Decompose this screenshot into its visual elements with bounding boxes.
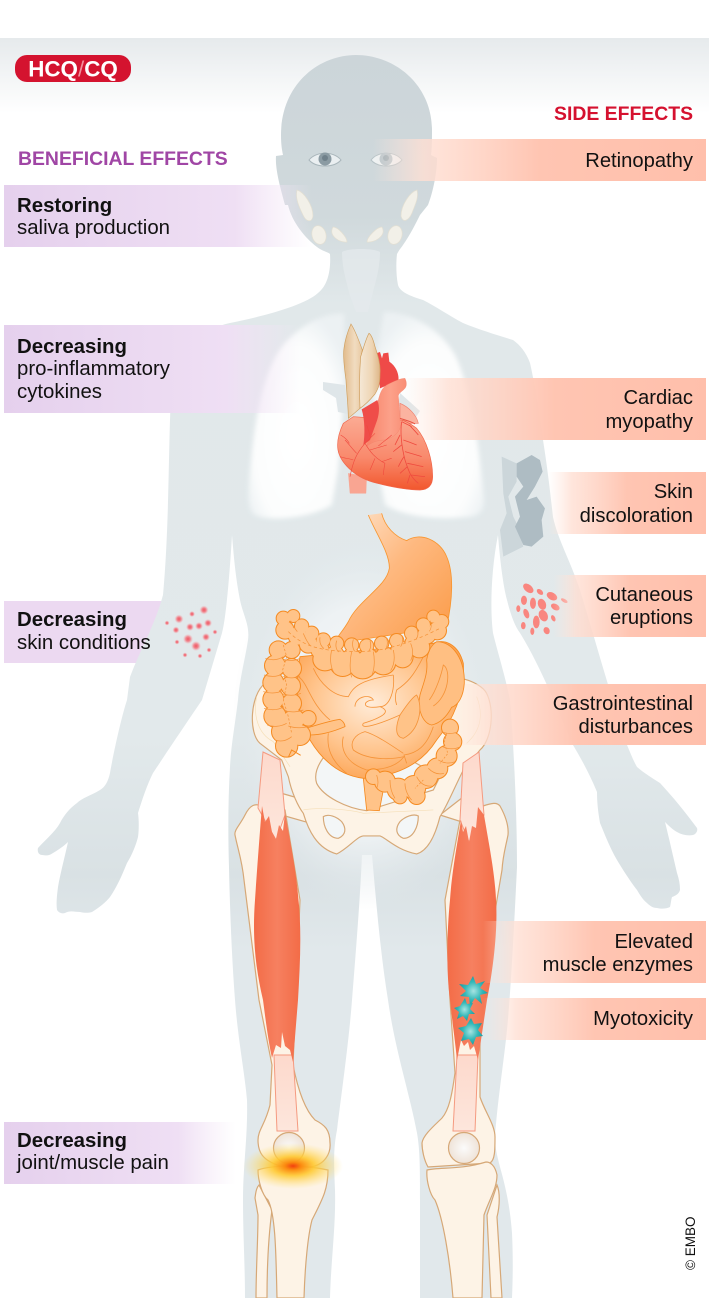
credit: © EMBO	[683, 1217, 698, 1270]
text: decreasing skin conditions: Decreasing	[17, 609, 127, 631]
text: decreasing joint pain	[16, 1130, 169, 1174]
text: cutaneous eruptions: Cutaneous	[595, 584, 693, 606]
text: elevated muscle enzymes	[543, 931, 693, 976]
text: restoring saliva production: Restoring	[17, 195, 112, 217]
text: decreasing cytokines: cytokines	[17, 381, 102, 403]
text: cardiac myopathy: Cardiac	[623, 387, 693, 409]
right femur	[422, 790, 508, 1167]
heading: beneficial effects: BENEFICIAL EFFECTS	[18, 148, 228, 170]
text: decreasing skin conditions	[17, 609, 151, 654]
left femur	[235, 790, 330, 1167]
small intestine	[297, 642, 463, 778]
band: gastrointestinal	[450, 684, 706, 745]
band: cardiac	[403, 378, 706, 440]
text: cardiac myopathy: myopathy	[605, 411, 694, 433]
intestinal folds	[298, 657, 448, 773]
text: decreasing joint pain: joint/muscle pain	[16, 1152, 169, 1174]
panel: heart	[338, 352, 433, 493]
icon: bronchi	[323, 382, 420, 417]
text: decreasing cytokines: pro-inflammatory	[17, 358, 171, 380]
band: restoring saliva	[4, 185, 312, 247]
panel: intestines	[263, 610, 464, 811]
icon: cutaneous eruptions	[516, 582, 568, 635]
band: pro-inflammatory	[4, 325, 300, 413]
text: gastrointestinal disturbances: disturbances	[579, 716, 693, 738]
text: restoring saliva production: saliva production	[17, 217, 170, 239]
text: gastrointestinal disturbances: Gastrointestinal	[553, 693, 693, 715]
text: cutaneous eruptions	[595, 584, 693, 629]
band: myotoxicity	[483, 998, 706, 1040]
text: restoring saliva production	[17, 195, 170, 239]
icon: skin condition dots	[164, 606, 218, 658]
left patella	[274, 1132, 304, 1164]
text: skin discoloration: Skin	[654, 481, 693, 503]
panel: pelvis	[252, 679, 491, 854]
band: skin conditions	[4, 601, 169, 663]
text: elevated muscle enzymes: muscle enzymes	[543, 954, 693, 976]
badge: HCQ/CQ: HCQ/CQ	[28, 56, 118, 82]
neck: trachea	[342, 249, 380, 312]
muscle: right thigh	[447, 752, 496, 1131]
text: skin discoloration: discoloration	[580, 505, 693, 527]
icon: stomach	[336, 513, 452, 643]
band: cutaneous	[553, 575, 706, 637]
icon: eyes	[309, 152, 402, 166]
text: retinopathy: Retinopathy	[585, 150, 694, 172]
right patella	[448, 1132, 480, 1164]
top background gradient	[0, 38, 709, 113]
text: gastrointestinal disturbances	[553, 693, 693, 738]
sigmoid colon	[366, 720, 461, 804]
text: elevated muscle enzymes: Elevated	[614, 931, 693, 953]
right lower leg bones	[427, 1162, 502, 1298]
icon: skin discoloration	[500, 455, 545, 557]
band: retinopathy	[373, 139, 706, 181]
colon	[263, 610, 448, 757]
icon: myotoxicity stars	[454, 976, 488, 1045]
text: decreasing cytokines	[17, 336, 171, 403]
left lower leg bones	[255, 1166, 328, 1298]
band: joint pain	[4, 1122, 236, 1184]
text: decreasing cytokines: Decreasing	[17, 336, 127, 358]
panel: lungs	[249, 312, 484, 518]
icon: knee pain glow	[243, 1143, 343, 1189]
heading: side effects: SIDE EFFECTS	[554, 103, 693, 125]
band: elevated enzymes	[483, 921, 706, 983]
text: skin discoloration	[580, 481, 693, 527]
rectum	[363, 777, 383, 811]
muscle: left thigh	[254, 752, 300, 1131]
icon: thymus lobes	[344, 324, 380, 418]
text: cutaneous eruptions: eruptions	[610, 607, 693, 629]
text: decreasing joint pain: Decreasing	[17, 1130, 127, 1152]
descending colon	[419, 642, 464, 725]
icon: salivary glands	[296, 190, 418, 246]
text: myotoxicity: Myotoxicity	[593, 1008, 694, 1030]
band: skin discoloration	[548, 472, 706, 534]
text: decreasing skin conditions: skin conditions	[17, 632, 151, 654]
text: cardiac myopathy	[605, 387, 694, 433]
